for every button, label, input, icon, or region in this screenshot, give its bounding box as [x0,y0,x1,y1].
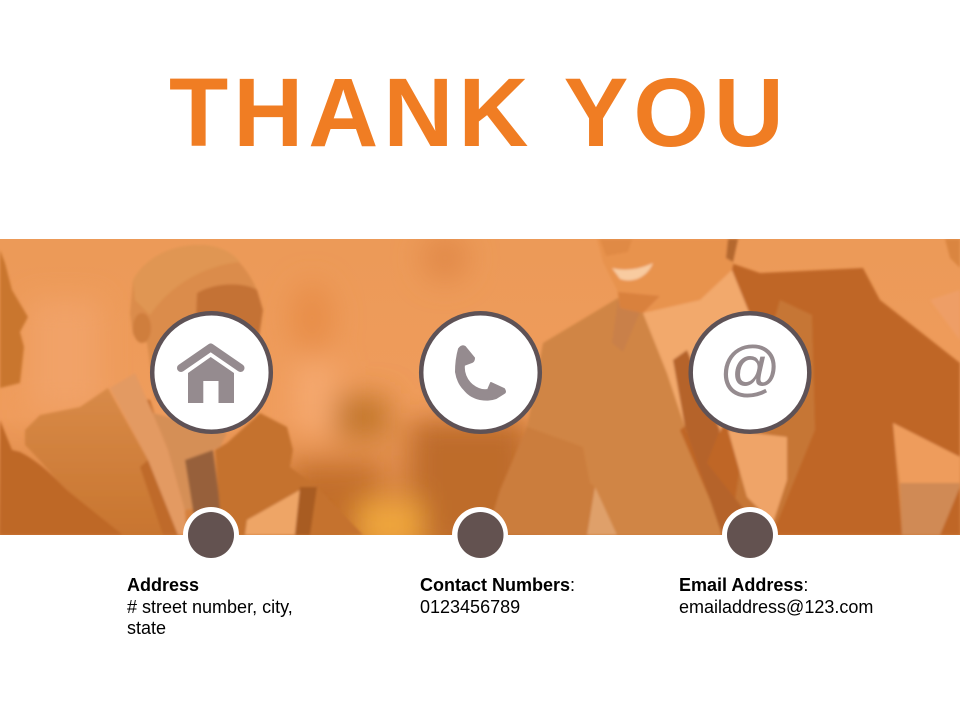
text block: address [127,575,293,638]
text block: contact numbers: Contact Numbers: [420,575,575,595]
icon circle: email [691,313,809,432]
icon: house [181,348,240,403]
right man face and smile [597,239,738,313]
centre-left man head [130,262,256,400]
title: THANK YOU [169,58,789,167]
centre-left man shirt and tie [153,413,227,510]
blurred background figures [30,234,530,555]
icon circle: home [152,313,271,432]
text block: email address [679,575,873,616]
text block: address: Address [127,575,199,595]
photo band with contact icons [0,239,960,558]
left person face [0,250,28,388]
photo: business people with orange tint [0,234,960,555]
text block: contact numbers: 0123456789 [420,596,520,616]
text block: contact numbers [420,575,575,616]
icon: phone handset [456,346,505,400]
clipboard [245,490,300,535]
text block: address: # street number, city, [127,596,293,616]
icon: at sign: @ [719,334,781,402]
right man tie [673,350,747,535]
right man jacket torso and left arm [523,298,725,535]
table and right hand [893,423,960,483]
icon circle: phone [421,313,540,432]
right man jacket right side [680,262,960,535]
centre-left man suit [25,388,163,535]
text block: address: state [127,618,166,638]
marker dot: address [188,512,234,558]
people artwork [0,239,960,535]
left person body [0,420,123,535]
marker dot: email [727,512,773,558]
marker dot: contact [458,512,504,558]
right man shirt [643,270,750,432]
text block: email address: emailaddress@123.com [679,596,873,616]
text block: email address: Email Address: [679,575,808,595]
white notches for markers [183,507,778,563]
